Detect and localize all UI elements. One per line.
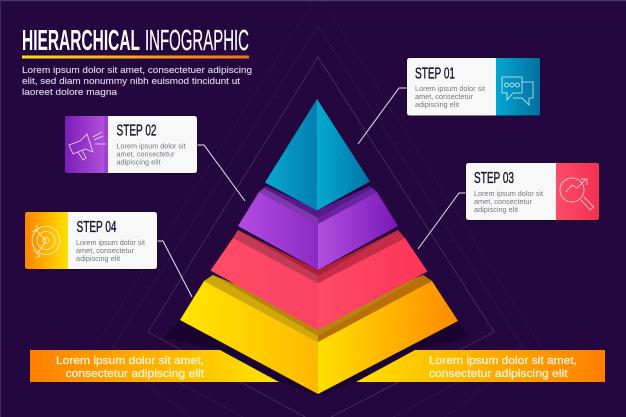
card: step 01	[406, 58, 540, 116]
icon: chat bubbles	[502, 77, 533, 105]
icon: target with arrows	[32, 225, 60, 258]
card: step 04: amet, consectetur	[76, 246, 134, 255]
intro text	[22, 65, 252, 98]
card: step 03: STEP 03	[474, 170, 514, 187]
level 4: yellow	[180, 275, 458, 394]
card: step 01: Lorem ipsum dolor sit	[415, 84, 486, 93]
intro text: Lorem ipsum dolor sit amet, consectetuer adipiscing	[22, 65, 252, 76]
card: step 02: amet, consectetur	[116, 150, 175, 158]
card: step 01: STEP 01	[415, 66, 455, 82]
pyramid ground shadow	[163, 300, 470, 396]
connector lines	[157, 88, 466, 297]
banner: left	[30, 350, 279, 382]
card: step 02: STEP 02	[116, 122, 157, 140]
title underline	[22, 56, 249, 58]
level 3: red	[210, 230, 428, 330]
icon: megaphone	[69, 132, 106, 160]
icon: magnifier with chart	[560, 178, 594, 210]
pyramid	[163, 99, 470, 396]
card: step 01: adipiscing elit	[415, 100, 460, 109]
card: step 02: Lorem ipsum dolor sit	[116, 142, 186, 150]
card: step 04: STEP 04	[76, 219, 117, 236]
card: step 03: Lorem ipsum dolor sit	[474, 189, 544, 198]
card: step 01: amet, consectetur	[415, 92, 473, 101]
intro text: laoreet dolore magna	[22, 87, 118, 98]
title: HIERARCHICAL	[22, 25, 140, 57]
banner: right	[356, 350, 605, 382]
card: step 02	[64, 116, 198, 174]
card: step 03: amet, consectetur	[474, 197, 532, 206]
banner: right: Lorem ipsum dolor sit amet,	[429, 355, 577, 367]
level 2: purple	[238, 186, 398, 270]
card: step 03: adipiscing elit	[474, 205, 519, 214]
card: step 04: adipiscing elit	[76, 254, 121, 263]
intro text: elit, sed diam nonummy nibh euismod tincidunt ut	[22, 76, 240, 87]
card: step 04: Lorem ipsum dolor sit	[76, 238, 146, 247]
card: step 02: adipiscing elit	[116, 158, 161, 166]
banner: left: consectetur adipiscing elit	[66, 368, 204, 380]
card: step 04	[24, 212, 158, 270]
card: step 03	[466, 162, 600, 221]
banner: left: Lorem ipsum dolor sit amet,	[56, 355, 204, 367]
title: INFOGRAPHIC	[145, 25, 249, 57]
banner: right: consectetur adipiscing elit	[429, 368, 568, 380]
level 1: blue	[265, 99, 370, 210]
